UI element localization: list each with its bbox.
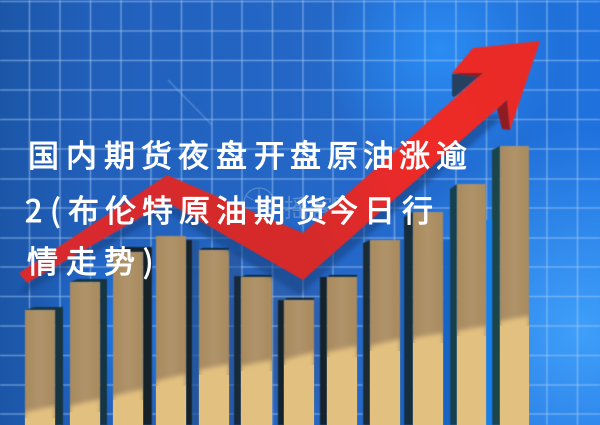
bar highlight: light band at column bases <box>25 316 529 425</box>
bar chart shadows and side faces <box>25 146 500 425</box>
arrow shadow <box>20 115 505 295</box>
red rising arrow <box>19 41 540 283</box>
title text <box>25 131 467 282</box>
watermark: 摇客网 <box>284 195 357 223</box>
watermark <box>244 188 357 235</box>
bars: twelve tan columns <box>25 146 529 425</box>
title line 3: 情走势) <box>27 237 153 282</box>
title line 1: 国内期货夜盘开盘原油涨逾 <box>28 131 467 176</box>
title line 2: 2(布伦特原油期货今日行 <box>25 186 433 231</box>
watermark: c.com <box>318 221 350 235</box>
